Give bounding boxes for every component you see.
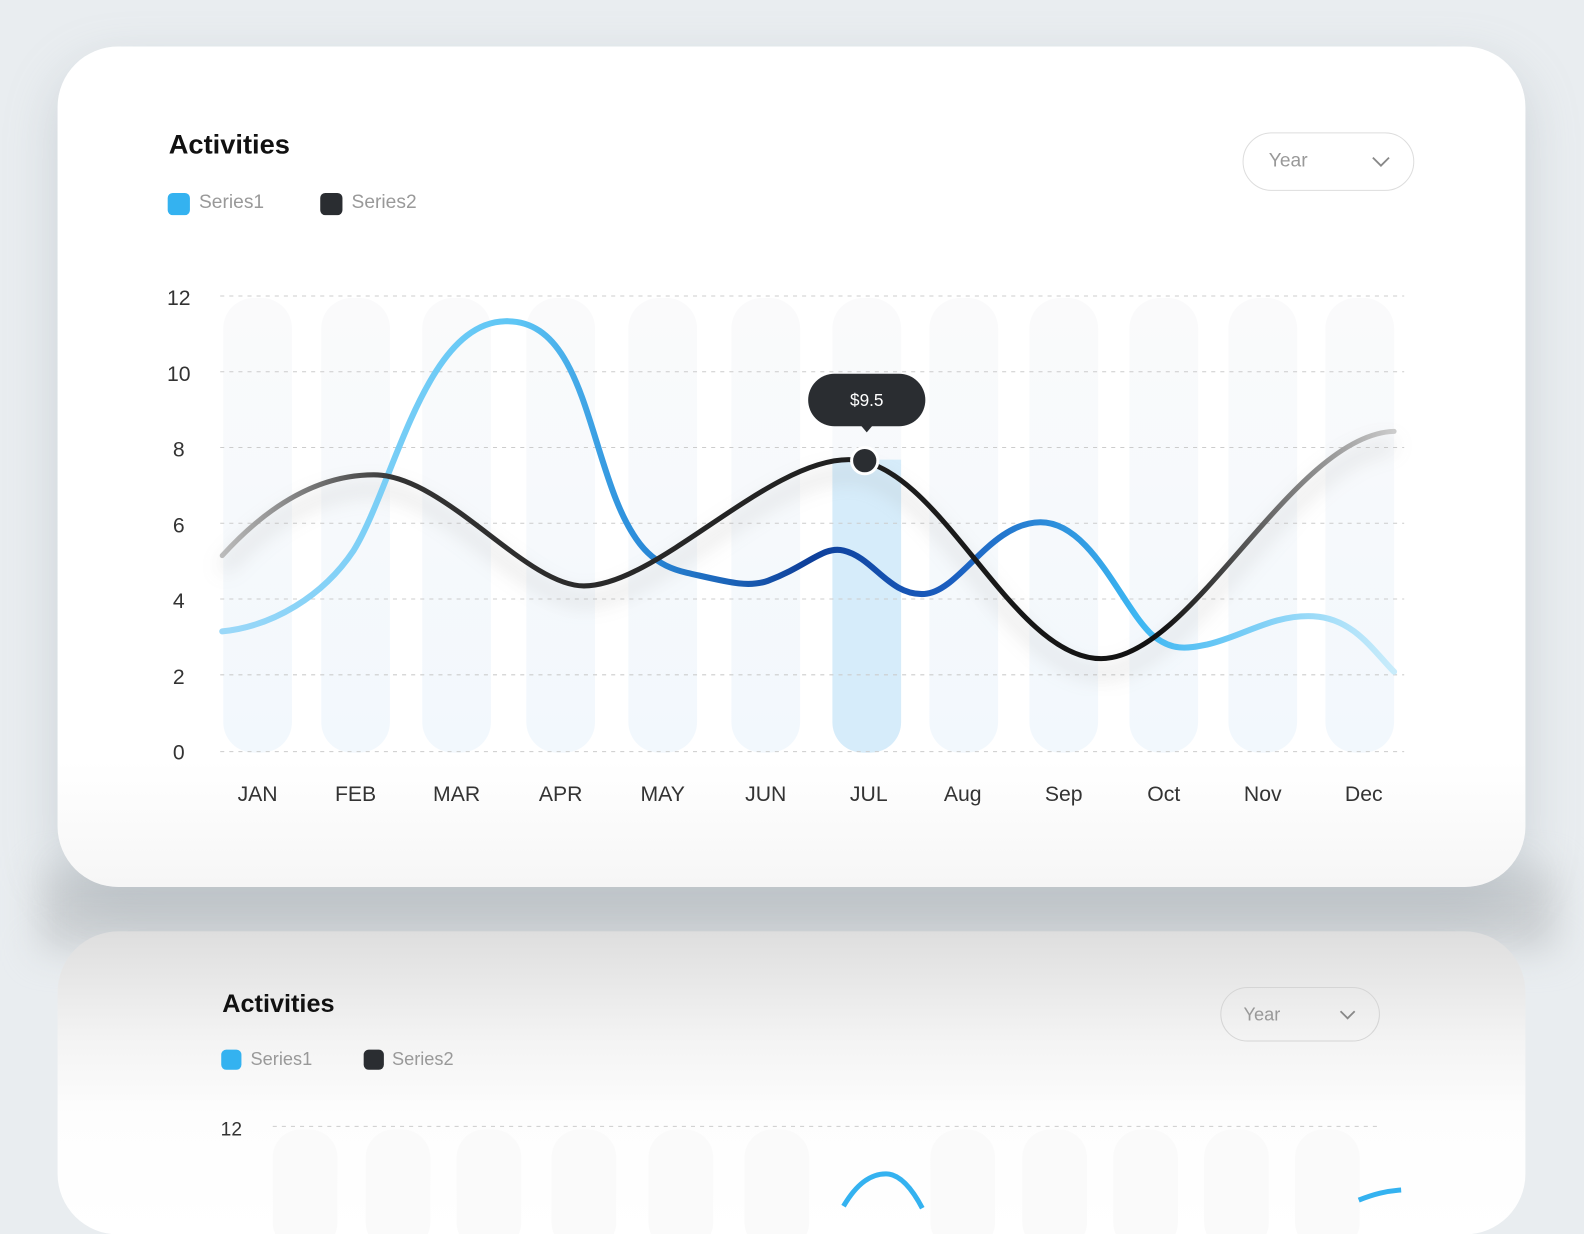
series1 line	[222, 321, 1394, 672]
title: Activities	[222, 990, 335, 1018]
data point JUL	[852, 448, 878, 474]
tooltip	[808, 374, 925, 432]
y axis labels: 8	[173, 439, 185, 462]
y axis labels: 4	[173, 590, 185, 613]
y axis labels	[167, 287, 191, 765]
series2 line	[222, 431, 1394, 659]
x axis labels: Sep	[1045, 783, 1083, 806]
year dropdown	[1220, 987, 1380, 1042]
x axis labels: JUN	[745, 783, 786, 806]
x axis labels: Dec	[1345, 783, 1383, 806]
x axis labels: APR	[539, 783, 582, 806]
x axis labels: MAY	[641, 783, 685, 806]
chart: top line chart	[167, 287, 1404, 806]
legend: Series2	[352, 192, 417, 213]
column backgrounds	[223, 298, 1394, 753]
legend: Series1	[199, 192, 264, 213]
panel: bottom chart card	[58, 931, 1525, 1234]
x axis labels: Nov	[1244, 783, 1282, 806]
x axis labels: FEB	[335, 783, 376, 806]
y axis labels: 10	[167, 363, 191, 386]
y axis labels: 0	[173, 742, 185, 765]
highlighted JUL column	[832, 460, 901, 753]
x axis labels: JAN	[238, 783, 278, 806]
legend	[221, 1049, 454, 1070]
x axis labels: Aug	[944, 783, 982, 806]
legend: Series1	[251, 1049, 312, 1069]
x axis labels: JUL	[850, 783, 888, 806]
year dropdown: Year	[1269, 151, 1308, 172]
panel: top chart card	[58, 46, 1525, 887]
y axis labels: 2	[173, 666, 185, 689]
shadow band between cards	[40, 869, 1556, 950]
y axis labels: 12	[167, 287, 191, 310]
year dropdown: Year	[1244, 1004, 1280, 1024]
y axis labels: 6	[173, 514, 185, 537]
bottom chart	[221, 1119, 1402, 1210]
legend	[168, 192, 417, 216]
series2 shadow	[222, 445, 1394, 673]
legend: Series2	[392, 1049, 454, 1069]
x axis labels	[238, 783, 1383, 806]
title: Activities	[169, 129, 290, 160]
year dropdown	[1243, 132, 1414, 191]
x axis labels: Oct	[1147, 783, 1180, 806]
tooltip: $9.5	[850, 390, 883, 410]
x axis labels: MAR	[433, 783, 480, 806]
bottom chart: 12	[221, 1119, 242, 1140]
